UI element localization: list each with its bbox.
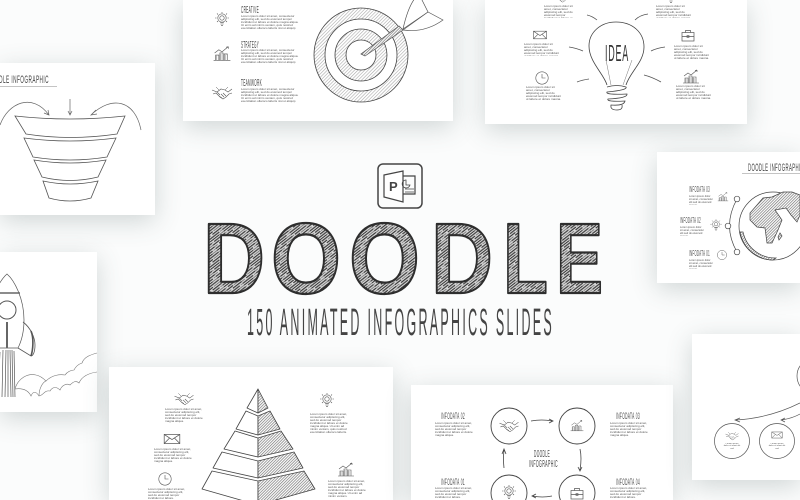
light bulb bbox=[589, 22, 644, 110]
dart bbox=[361, 0, 443, 56]
panel: cycle slide: INFODATA 01 bbox=[441, 477, 465, 487]
node: handshake bbox=[714, 424, 750, 458]
panel: globe slide bbox=[657, 152, 800, 283]
icon: bulb bbox=[320, 393, 334, 406]
icon: clock bbox=[159, 473, 171, 485]
text block: handshake node: Lorem ipsum dolor sit amet elit sed bbox=[724, 443, 740, 450]
panel: idea slide bbox=[485, 0, 747, 124]
icon: briefcase bbox=[682, 30, 694, 41]
panel: idea slide: IDEA bbox=[605, 40, 629, 66]
globe bbox=[739, 192, 800, 260]
cycle circles bbox=[491, 408, 595, 500]
text block: envelope node: Lorem ipsum dolor sit amet elit sed bbox=[769, 443, 785, 450]
icon: clock bbox=[536, 72, 548, 84]
panel: cycle slide: INFODATA 02 bbox=[441, 411, 465, 421]
panel: globe slide: INFODATA 03 bbox=[689, 185, 710, 194]
title: DOODLE: E bbox=[556, 203, 603, 315]
icon: chart bbox=[338, 463, 354, 476]
panel: funnel slide bbox=[0, 63, 155, 215]
icon: chart bbox=[683, 70, 699, 83]
icon: clock bbox=[717, 250, 727, 260]
rays bbox=[569, 14, 665, 82]
orbit with nodes bbox=[725, 196, 740, 255]
title: DOODLE: L bbox=[503, 203, 548, 315]
icon: chart bbox=[718, 192, 728, 201]
panel: cycle slide: INFOGRAPHIC bbox=[529, 459, 558, 470]
panel: cycle slide: DOODLE bbox=[534, 449, 550, 460]
panel: cycle slide bbox=[411, 385, 673, 500]
title: DOODLE bbox=[203, 203, 603, 315]
icon: top left cut bbox=[555, 0, 569, 2]
icon: envelope bbox=[534, 31, 546, 39]
cycle icons bbox=[500, 420, 583, 499]
panel: target slide: CREATIVE bbox=[241, 5, 259, 16]
panel: target slide: STRATEGY bbox=[241, 40, 259, 51]
branch arrows bbox=[735, 403, 800, 422]
top node bbox=[797, 358, 800, 394]
cycle arrows bbox=[502, 419, 582, 498]
panel: globe slide: INFODATA 02 bbox=[680, 216, 701, 225]
icon: bulb bbox=[710, 219, 722, 230]
title: DOODLE: D bbox=[203, 203, 265, 315]
icon: top right cut bbox=[664, 0, 678, 2]
panel: target slide bbox=[183, 0, 453, 121]
title: DOODLE: D bbox=[431, 203, 493, 315]
center heading bbox=[529, 449, 558, 470]
title: DOODLE: O bbox=[271, 203, 341, 315]
pyramid bbox=[202, 389, 315, 500]
panel: target slide: TEAMWORK bbox=[241, 78, 262, 89]
icon: handshake bbox=[174, 393, 194, 405]
icon: powerpoint bbox=[378, 164, 422, 208]
target rings bbox=[314, 8, 408, 102]
icon: chart bbox=[214, 47, 230, 60]
panel: globe slide: INFODATA 01 bbox=[689, 249, 710, 258]
node: envelope bbox=[760, 424, 794, 458]
icon: handshake bbox=[212, 87, 232, 99]
funnel layers bbox=[15, 116, 125, 201]
funnel arrows bbox=[0, 99, 141, 130]
panel: rocket slide bbox=[0, 252, 97, 412]
icon: bulb bbox=[215, 12, 229, 25]
panel: right tree slide bbox=[692, 334, 800, 480]
funnel heading bbox=[0, 74, 57, 86]
title: DOODLE: O bbox=[349, 203, 420, 315]
exhaust clouds bbox=[15, 353, 97, 396]
rocket bbox=[0, 274, 35, 397]
icon: powerpoint: P bbox=[389, 179, 398, 194]
icon: envelope bbox=[164, 434, 180, 444]
panel: pyramid slide bbox=[109, 367, 393, 500]
